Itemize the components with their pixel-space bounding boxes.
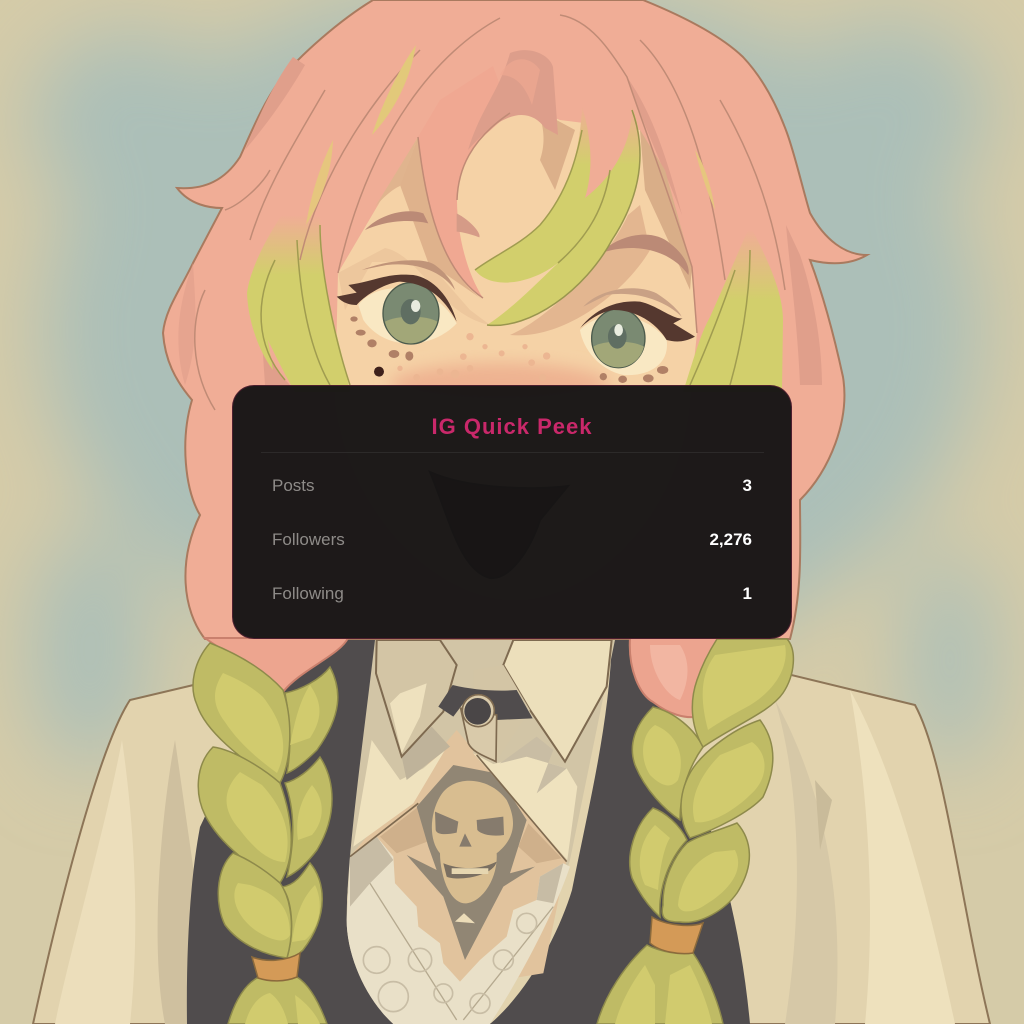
eyebrows xyxy=(365,211,428,230)
left braid highlights xyxy=(215,673,322,1024)
row: followers xyxy=(272,530,752,549)
tie tab xyxy=(461,708,497,762)
lace xyxy=(347,837,570,1024)
row: following: 1 xyxy=(743,584,752,603)
shirt front highlights xyxy=(353,740,445,847)
freckles and mole xyxy=(350,316,668,383)
hair: pink wedge in green strand xyxy=(580,100,632,198)
card title: IG Quick Peek xyxy=(432,414,592,439)
right braid xyxy=(597,639,793,1024)
back hair: main pink silhouette xyxy=(163,0,867,639)
forehead shadows xyxy=(400,137,483,300)
hair: lines and yellow streaks xyxy=(195,15,785,410)
green hair: left lower locks xyxy=(247,213,350,392)
ghost: mouth and tongue under card xyxy=(430,472,568,578)
green hair: right lower locks xyxy=(683,225,783,392)
skull tattoo xyxy=(407,765,535,960)
left braid tie xyxy=(252,953,300,981)
hair: green front strand xyxy=(475,107,640,325)
row: posts xyxy=(272,476,752,495)
vest: dark waistcoat xyxy=(187,636,750,1024)
row: followers: 2,276 xyxy=(709,530,752,549)
collar band xyxy=(438,685,533,720)
row: posts: 3 xyxy=(743,476,752,495)
collar xyxy=(376,640,457,757)
right eye xyxy=(580,316,667,375)
chest: collar, skull tattoo and lace xyxy=(347,640,615,1024)
eyebrows, eyes and freckles xyxy=(337,211,695,383)
hair shading patches xyxy=(178,57,822,385)
hair: top parting arch xyxy=(468,50,558,150)
shirt: shoulders and sleeves xyxy=(33,648,990,1024)
left eye xyxy=(358,288,457,344)
right braid tie xyxy=(650,917,703,954)
left braid xyxy=(193,643,338,1024)
right braid highlights xyxy=(615,645,786,1024)
row: posts: Posts xyxy=(272,476,315,495)
row: followers: Followers xyxy=(272,530,345,549)
row: following xyxy=(272,584,752,603)
hair: pink strand across forehead xyxy=(418,66,510,298)
face: visible skin xyxy=(335,110,697,600)
skin diamond xyxy=(350,730,567,987)
button xyxy=(462,695,494,727)
stats card xyxy=(232,385,792,639)
row: following: Following xyxy=(272,584,344,603)
pink braid sections xyxy=(205,638,720,717)
